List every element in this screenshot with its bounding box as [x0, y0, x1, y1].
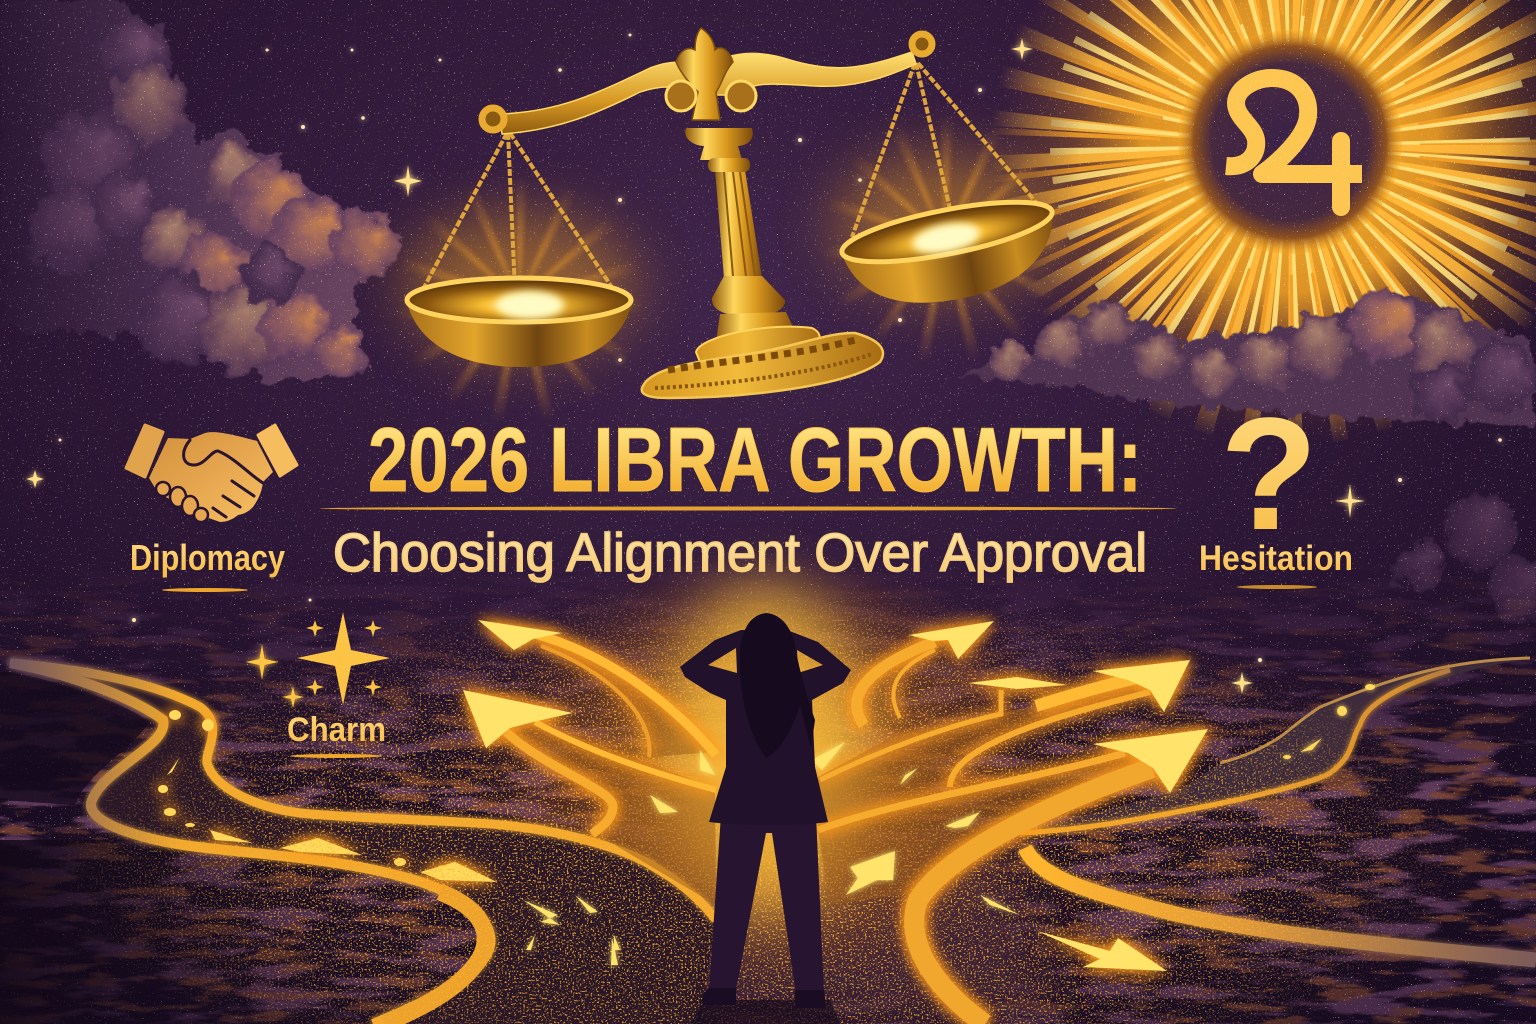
arrow: top right — [857, 621, 994, 725]
label: diplomacy: Diplomacy — [130, 537, 285, 578]
lower road edge — [1020, 670, 1450, 833]
upper road edge — [1220, 658, 1530, 763]
collar rings — [712, 276, 785, 316]
step — [696, 327, 820, 362]
left chains — [421, 133, 615, 313]
arrow: mushroom small — [820, 677, 1068, 780]
road surface — [10, 663, 716, 1024]
fleur ornament — [676, 28, 733, 120]
branching golden arrows — [463, 620, 1208, 1024]
right winding road — [1020, 658, 1530, 833]
dark lower corners — [0, 672, 330, 1024]
icon: question mark: ? — [1220, 384, 1318, 563]
icon: sparkle cluster — [246, 612, 390, 708]
column — [708, 158, 762, 278]
hesitation block — [1199, 384, 1353, 589]
shadow — [690, 1000, 840, 1024]
icon: handshake — [126, 425, 297, 522]
title: 2026 LIBRA GROWTH: — [368, 410, 1142, 511]
diplomacy underline — [162, 588, 248, 592]
ground behind roads — [500, 830, 1060, 1024]
label: hesitation: Hesitation — [1199, 539, 1353, 578]
title underline — [320, 506, 1176, 510]
larger stars — [58, 34, 1502, 662]
sparkles in sky — [26, 38, 1365, 694]
hair — [740, 613, 815, 758]
pedestal ornament — [716, 312, 798, 342]
hesitation underline — [1237, 585, 1317, 589]
road glow spots — [158, 710, 497, 882]
golden balance scale — [405, 28, 1065, 398]
jacket and arms — [680, 630, 851, 825]
right chains — [852, 63, 1040, 243]
left pan burst — [439, 220, 599, 380]
capital — [685, 128, 753, 160]
right pan — [838, 190, 1065, 319]
sun rays — [1075, 0, 1505, 360]
clouds: upper left — [0, 0, 405, 383]
road edge thick bend — [385, 892, 485, 1024]
arrow: top left — [478, 620, 716, 757]
arrow: left large — [463, 690, 716, 834]
glowing shards — [523, 742, 1020, 965]
label: charm: Charm — [287, 711, 386, 749]
clouds: right — [955, 289, 1536, 626]
arrow: lower right — [1037, 931, 1167, 971]
charm block — [246, 612, 390, 758]
right pan burst — [865, 160, 1025, 320]
arrow: upper right — [950, 660, 1190, 787]
icon: jupiter symbol — [1226, 78, 1362, 207]
left pan — [407, 278, 632, 367]
left beam end scroll — [482, 108, 504, 130]
left pan glow — [405, 215, 635, 355]
upper road edge — [10, 663, 716, 920]
sun disc — [1178, 30, 1402, 254]
woman silhouette — [680, 613, 851, 1024]
feet — [702, 988, 826, 1008]
sun glow — [995, 0, 1536, 440]
beam — [500, 52, 916, 134]
road surface — [1020, 658, 1530, 833]
right beam end scroll — [912, 34, 932, 54]
gold dust — [62, 586, 1479, 1024]
left winding road — [10, 663, 716, 1024]
road bands — [506, 636, 1152, 905]
terrain texture — [0, 560, 1536, 1024]
scroll volutes — [666, 81, 756, 111]
bright glow around figure — [665, 585, 865, 915]
arrow: right large — [818, 729, 1208, 1024]
lower road edge — [10, 663, 490, 1024]
jupiter sun — [995, 0, 1536, 440]
base — [642, 333, 883, 398]
legs — [709, 815, 824, 993]
central golden glow behind figure — [465, 550, 1065, 990]
subtitle: Choosing Alignment Over Approval — [333, 523, 1147, 583]
charm underline — [290, 754, 382, 758]
road glow spots — [1283, 684, 1375, 759]
diplomacy block — [126, 425, 297, 592]
lower right road — [1025, 848, 1536, 960]
right pan glow — [835, 155, 1055, 295]
